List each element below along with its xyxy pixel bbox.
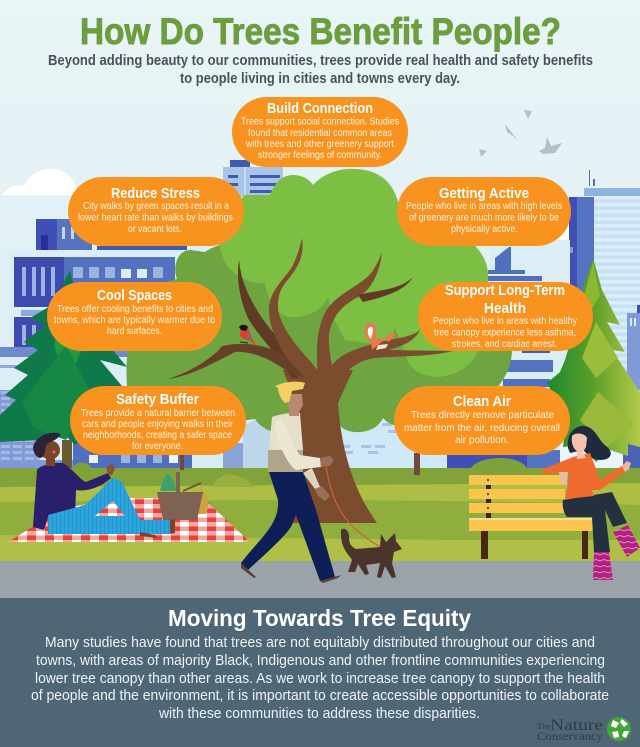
- panel: support long-term health: People who live in areas with healthy: [433, 316, 578, 327]
- panel: cool spaces: hard surfaces.: [107, 326, 162, 337]
- logo: the nature conservancy: Conservancy: [537, 731, 603, 743]
- heading: tree equity: Moving Towards Tree Equity: [168, 605, 471, 631]
- body text: tree equity: towns, with areas of majority Black, Indigenous and other frontline communities experiencing: [36, 653, 605, 669]
- panel: build connection: with trees and other greenery support: [245, 139, 394, 150]
- panel: build connection: found that residential common areas: [248, 128, 392, 139]
- logo: the nature conservancy: The: [537, 722, 550, 731]
- background sapling trunks: [180, 450, 420, 475]
- panel: safety buffer: Trees provide a natural barrier between: [81, 408, 235, 419]
- woman: boots: [593, 525, 640, 580]
- body text: tree equity: lower tree canopy than other areas. As we work to increase tree canopy to support the health: [35, 671, 605, 687]
- leash: [326, 467, 393, 553]
- man: hands: [315, 456, 334, 501]
- buildings: left skyline: [0, 219, 223, 470]
- sky background: [0, 0, 640, 470]
- panel: cool spaces: towns, which are typically warmer due to: [54, 315, 215, 326]
- title: How Do Trees Benefit People?: [80, 11, 561, 52]
- picnic basket: [157, 472, 208, 520]
- woman: face: [572, 434, 587, 459]
- panel: safety buffer: cars and people enjoying walks in their: [82, 419, 234, 430]
- road: [0, 561, 640, 598]
- woman: top: [541, 453, 625, 499]
- panel: reduce stress: Reduce Stress: [111, 186, 200, 202]
- panel: clean air: [394, 386, 570, 455]
- panel: clean air: Trees directly remove particulate: [411, 410, 554, 421]
- man walking: [241, 382, 341, 583]
- panel: getting active: People who live in areas with high levels: [406, 201, 562, 212]
- panel: clean air: Clean Air: [453, 394, 511, 410]
- tree branches: [168, 238, 453, 382]
- subtitle: to people living in cities and towns every day.: [180, 70, 460, 87]
- dog: [341, 529, 402, 578]
- subtitle: [48, 52, 593, 87]
- panel: build connection: Trees support social connection. Studies: [241, 116, 399, 128]
- panel: clean air: air pollution.: [455, 435, 509, 446]
- man: legs: [241, 472, 335, 581]
- buildings: right skyline: [223, 170, 640, 470]
- panel: moving towards tree equity: [0, 598, 640, 747]
- pine tree: left: [0, 270, 127, 468]
- panel: cool spaces: [47, 282, 222, 351]
- tree canopy: dark layer: [126, 238, 512, 444]
- panel: build connection: Build Connection: [267, 101, 373, 117]
- buildings: small block behind tree: [223, 160, 283, 197]
- panel: build connection: [232, 97, 408, 167]
- woman on bench: [541, 426, 640, 580]
- panel: build connection: stronger feelings of community.: [258, 150, 382, 161]
- body text: tree equity: Many studies have found that trees are not equitably distributed throughout our cities and: [45, 635, 595, 651]
- tree trunk: [283, 370, 377, 523]
- ground: [0, 458, 640, 563]
- panel: reduce stress: or vacant lots.: [128, 224, 182, 235]
- panel: reduce stress: [68, 177, 244, 246]
- body text: tree equity: with these communities to address these disparities.: [158, 706, 480, 722]
- woman: hair: [568, 426, 611, 460]
- tree canopy: light layer: [219, 169, 488, 377]
- panel: support long-term health: strokes, and cardiac arrest.: [452, 339, 557, 350]
- panel: getting active: of greenery are much more likely to be: [409, 212, 559, 224]
- person on blanket: [33, 433, 175, 538]
- tree: [126, 169, 512, 523]
- woman: hands: [559, 461, 631, 485]
- panel: support long-term health: Health: [484, 301, 526, 317]
- panel: safety buffer: [70, 386, 246, 455]
- body text: tree equity: [31, 635, 609, 722]
- panel: support long-term health: tree canopy experience less asthma,: [434, 328, 576, 338]
- logo: the nature conservancy: Nature: [550, 717, 603, 734]
- panel: getting active: [397, 177, 571, 246]
- panel: safety buffer: Safety Buffer: [116, 392, 199, 408]
- squirrel on branch: [365, 323, 395, 350]
- man: sweater: [268, 413, 303, 472]
- bird on branch: [239, 325, 257, 347]
- woman: trousers: [563, 492, 627, 552]
- logo: the nature conservancy: [537, 717, 631, 743]
- panel: reduce stress: City walks by green spaces result in a: [83, 201, 229, 212]
- bench: [469, 475, 595, 559]
- panel: support long-term health: [418, 282, 593, 351]
- panel: reduce stress: lower heart rate than walks by buildings: [78, 212, 233, 224]
- clouds: [2, 169, 630, 269]
- birds: [479, 110, 562, 157]
- panel: safety buffer: neighborhoods, creating a safer space: [83, 430, 232, 441]
- panel: cool spaces: Cool Spaces: [97, 288, 172, 304]
- panel: getting active: physically active.: [451, 224, 518, 235]
- panel: getting active: Getting Active: [439, 186, 529, 202]
- man: shoes: [241, 563, 341, 583]
- panel: support long-term health: Support Long-Term: [445, 283, 565, 299]
- picnic blanket: [8, 498, 250, 542]
- panel: clean air: matter from the air, reducing overall: [404, 423, 560, 434]
- man: head: [287, 394, 303, 416]
- panel: safety buffer: for everyone.: [132, 441, 183, 452]
- panel: cool spaces: Trees offer cooling benefits to cities and: [57, 304, 213, 315]
- body text: tree equity: of people and the environment, it is important to create accessible opportunities to collaborate: [31, 688, 609, 704]
- pine tree: right: [547, 258, 640, 462]
